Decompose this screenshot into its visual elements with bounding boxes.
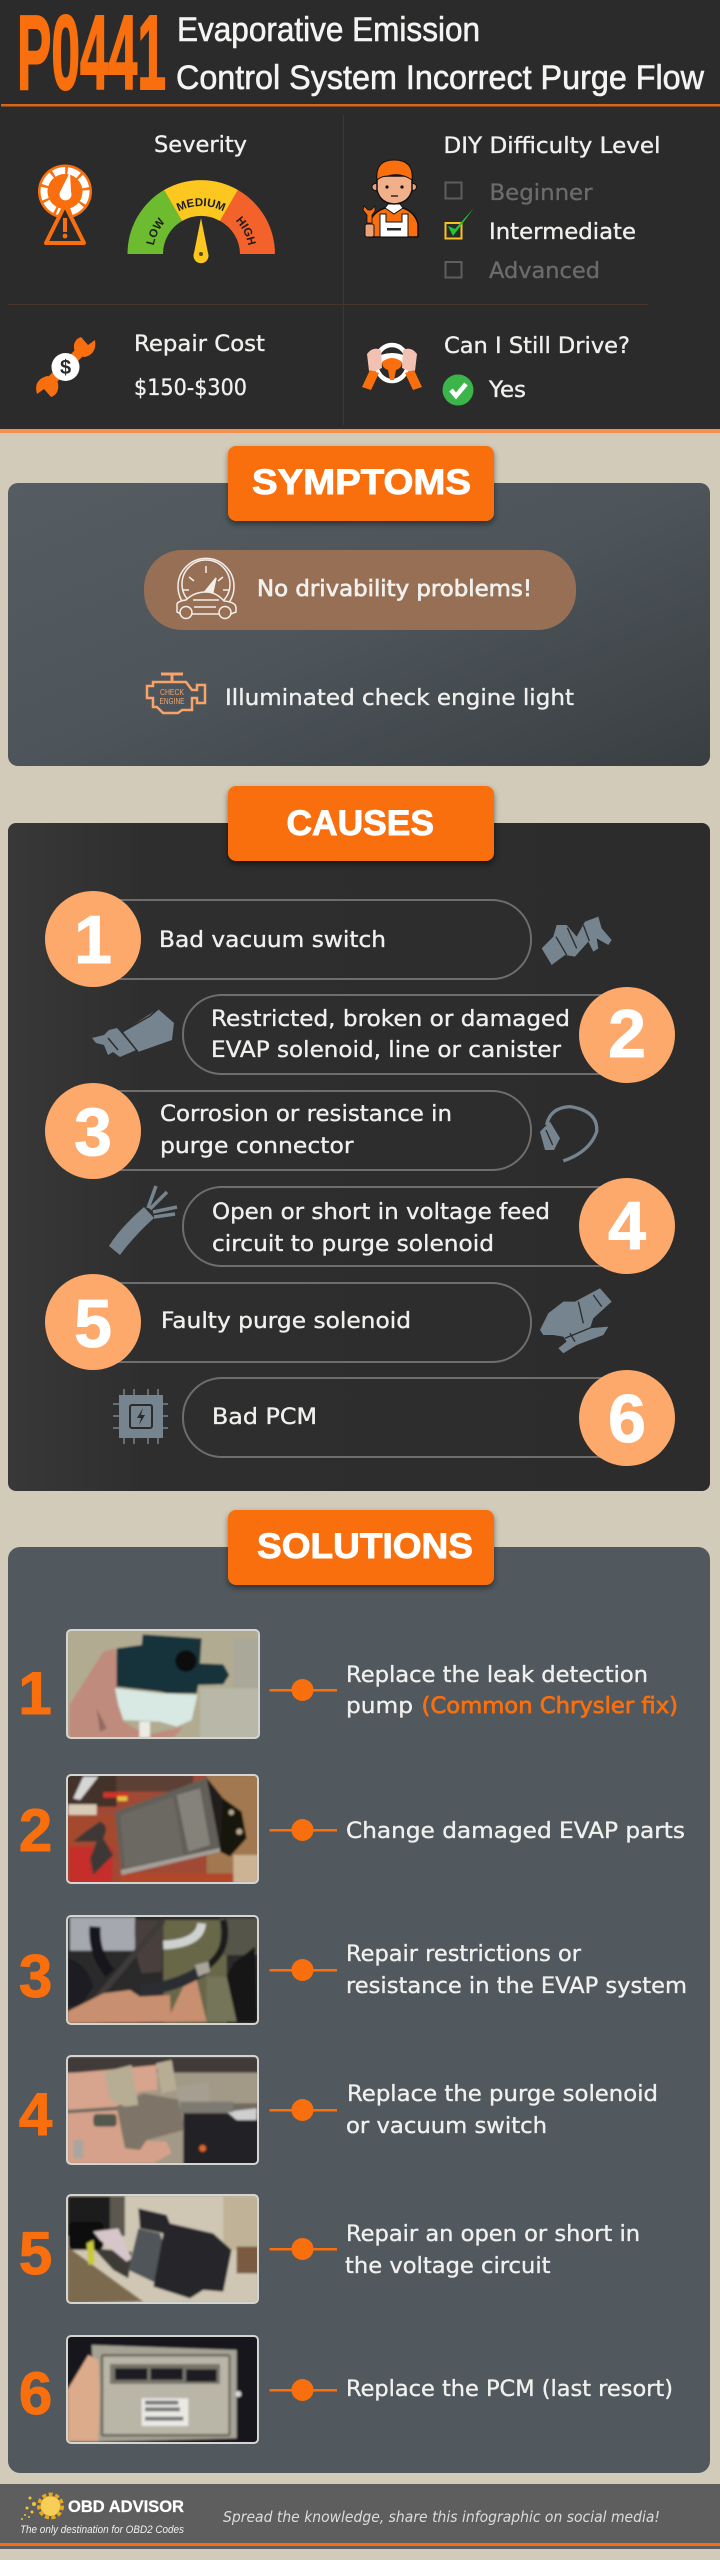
- solution 1: [18, 1629, 678, 1739]
- gauge chart: severity medium: MEDIUM: [176, 198, 226, 212]
- answer: yes: [442, 374, 526, 406]
- cause 5: 5: [74, 1286, 112, 1362]
- icon: severity gauge warning: [38, 164, 92, 243]
- photo: EVAP canister: [67, 1775, 258, 1883]
- causes heading tab: [228, 786, 494, 861]
- cause 4: circuit to purge solenoid: [212, 1232, 494, 1257]
- solution 6: 6: [19, 2360, 52, 2427]
- symptom text: Illuminated check engine light: [225, 686, 574, 711]
- panel: causes: [8, 786, 710, 1491]
- logo: OBD Advisor: [20, 2494, 184, 2536]
- solution text: the voltage circuit: [345, 2254, 551, 2279]
- solution text: [346, 1663, 678, 1719]
- footer: [0, 2484, 720, 2549]
- icon: purge solenoid: [540, 1288, 612, 1353]
- cause 4: 4: [608, 1188, 646, 1264]
- solution 1: 1: [18, 1660, 52, 1727]
- gauge chart: severity medium: [128, 180, 275, 264]
- tagline: The only destination for OBD2 Codes: [20, 2524, 184, 2536]
- option: beginner: Beginner: [490, 181, 593, 206]
- connector: [270, 1959, 337, 1981]
- solution 4: [19, 2056, 658, 2165]
- cause 2: EVAP solenoid, line or canister: [211, 1038, 562, 1063]
- causes heading tab: CAUSES: [286, 804, 434, 843]
- gauge needle: [194, 218, 208, 263]
- photo: EVAP hoses: [67, 1916, 258, 2024]
- share message: Spread the knowledge, share this infographic on social media!: [223, 2508, 660, 2526]
- option: intermediate checked: Intermediate: [489, 220, 636, 245]
- connector: [270, 1679, 337, 1701]
- cause 5: [45, 1274, 612, 1370]
- cause 6: 6: [608, 1381, 646, 1457]
- repair cost heading: Repair Cost: [134, 332, 265, 357]
- solution 3: [19, 1916, 687, 2024]
- icon: speedometer and car: [177, 558, 236, 618]
- icon: wrench with dollar: $: [60, 357, 71, 379]
- solution text: [346, 2082, 658, 2139]
- solution text: Repair restrictions or: [346, 1942, 582, 1967]
- solution 2: [19, 1775, 685, 1883]
- solution text: [345, 2222, 640, 2279]
- icon: chip: [113, 1389, 168, 1444]
- solution 2: 2: [19, 1797, 52, 1864]
- symptom text: No drivability problems!: [257, 577, 532, 602]
- connector: [270, 2238, 337, 2260]
- icon: check engine: CHECK: [160, 688, 185, 697]
- cause 3: [45, 1083, 597, 1179]
- cause 3: purge connector: [160, 1134, 355, 1159]
- solution text: resistance in the EVAP system: [346, 1974, 687, 1999]
- photo: connector and wiring: [67, 2195, 258, 2303]
- icon: wire bundle: [109, 1186, 177, 1255]
- icon: connector wire: [540, 1107, 597, 1161]
- connector: [270, 2379, 337, 2401]
- photo: leak detection pump in hand: [67, 1629, 260, 1739]
- cause 1: 1: [74, 902, 112, 978]
- solution text: pump: [346, 1694, 413, 1719]
- connector: [270, 1819, 337, 1841]
- solution text: Change damaged EVAP parts: [346, 1819, 685, 1844]
- symptom: check engine light: [147, 674, 574, 713]
- cause 4: [109, 1178, 675, 1274]
- solution text: [346, 1942, 687, 1999]
- photo: purge solenoid in hand: [67, 2056, 258, 2165]
- cause 6: Bad PCM: [212, 1405, 317, 1430]
- option: intermediate checked: [446, 208, 636, 245]
- solution 4: 4: [19, 2081, 53, 2148]
- icon: gear: [21, 2494, 62, 2520]
- icon: check engine: ENGINE: [160, 697, 184, 706]
- solution 5: [19, 2195, 640, 2303]
- cause 2: [92, 987, 675, 1083]
- symptoms heading tab: SYMPTOMS: [252, 463, 471, 502]
- symptoms heading tab: [228, 446, 494, 521]
- solution text: Replace the PCM (last resort): [346, 2377, 673, 2402]
- icon: check engine: [147, 674, 205, 713]
- cause 4: Open or short in voltage feed: [212, 1200, 550, 1225]
- icon: hands on steering wheel: [362, 345, 422, 390]
- title line 2: Control System Incorrect Purge Flow: [176, 59, 704, 97]
- title line 1: Evaporative Emission: [177, 11, 480, 49]
- icon: vacuum switch: [542, 917, 612, 965]
- panel: header summary: [0, 0, 720, 433]
- cause 1: Bad vacuum switch: [159, 928, 386, 953]
- option: advanced: Advanced: [489, 259, 600, 284]
- solution text: Replace the leak detection: [346, 1663, 648, 1688]
- solution 3: 3: [19, 1943, 52, 2010]
- panel: solutions: [8, 1510, 710, 2473]
- cause 3: 3: [74, 1094, 112, 1170]
- severity heading: Severity: [154, 133, 247, 158]
- cause 5: Faulty purge solenoid: [161, 1309, 411, 1334]
- option: beginner: [446, 181, 593, 206]
- can I still drive heading: Can I Still Drive?: [444, 334, 630, 359]
- cause 2: 2: [608, 996, 646, 1072]
- logo wordmark: OBD ADVISOR: [68, 2497, 184, 2516]
- repair cost value: $150-$300: [134, 376, 247, 401]
- solution text: Replace the purge solenoid: [347, 2082, 658, 2107]
- panel: symptoms: [8, 446, 710, 766]
- solution 5: 5: [19, 2220, 52, 2287]
- gauge chart: severity medium: HIGH: [236, 216, 256, 245]
- solution text: (Common Chrysler fix): [422, 1694, 678, 1719]
- photo: PCM module: [67, 2335, 258, 2443]
- cause 1: [45, 891, 612, 987]
- icon: wrench with dollar: [36, 337, 95, 397]
- cause 3: Corrosion or resistance in: [160, 1102, 452, 1127]
- solution text: Repair an open or short in: [346, 2222, 640, 2247]
- gauge labels: LOW: [146, 217, 164, 245]
- icon: mechanic: [363, 160, 418, 237]
- solution text: or vacuum switch: [346, 2114, 547, 2139]
- cause 2: Restricted, broken or damaged: [211, 1007, 570, 1032]
- symptom pill: no drivability problems: [144, 550, 576, 630]
- cause 6: [113, 1370, 675, 1466]
- solutions heading tab: [228, 1510, 494, 1585]
- answer: yes: Yes: [488, 378, 526, 403]
- DIY heading: DIY Difficulty Level: [444, 134, 660, 159]
- connector: [270, 2099, 337, 2121]
- solutions heading tab: SOLUTIONS: [257, 1527, 473, 1566]
- solution 6: [19, 2335, 673, 2443]
- icon: canister: [92, 1009, 174, 1057]
